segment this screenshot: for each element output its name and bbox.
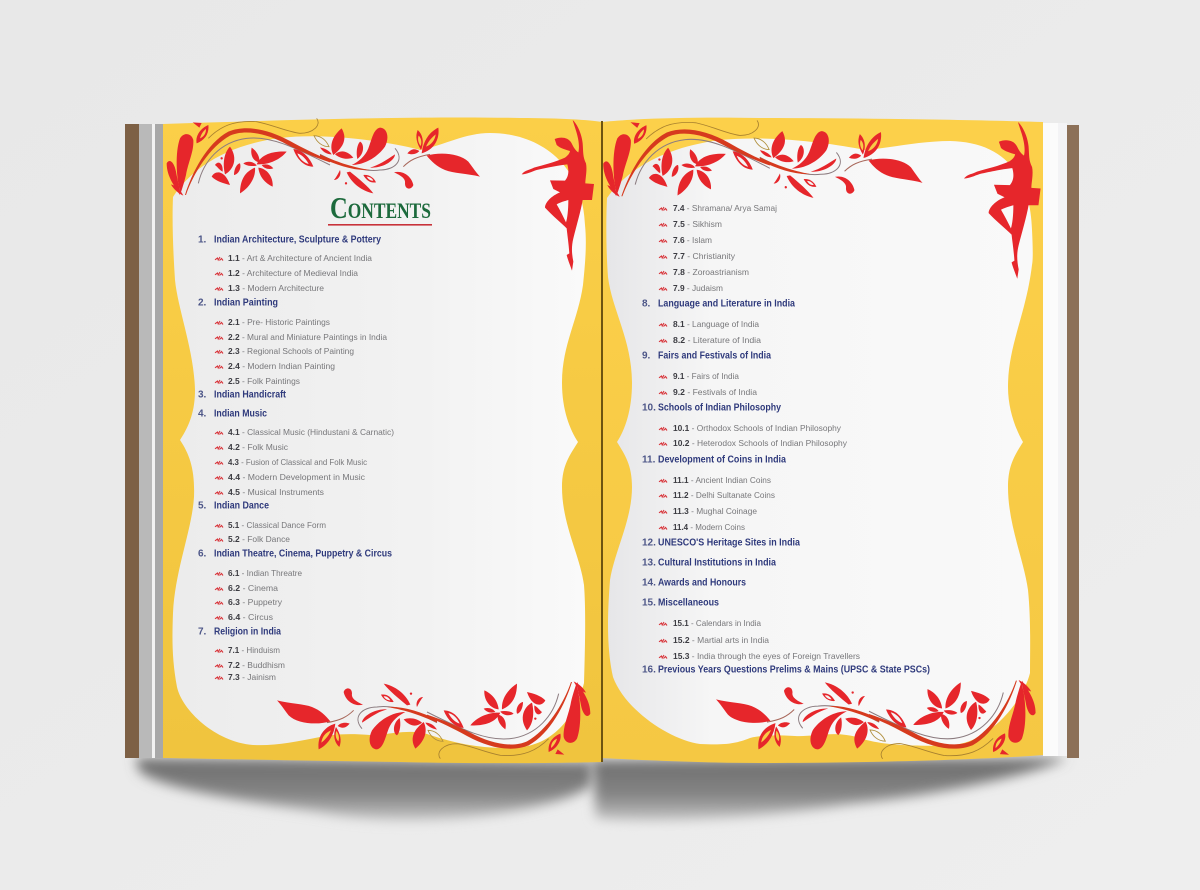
section 16: 16.: [642, 664, 656, 676]
floral ornament: right page top: [603, 118, 924, 202]
section 8: 8.: [642, 298, 651, 310]
section 4: 4.1 - Classical Music (Hindustani & Carnatic): [228, 427, 394, 437]
section 13: 13.: [642, 558, 656, 568]
floral ornament: left page bottom: [277, 681, 590, 759]
section 10: 10.2 - Heterodox Schools of Indian Philosophy: [673, 438, 848, 448]
section 5: 5.: [198, 500, 207, 512]
section 7 continued: 7.5 - Sikhism: [673, 219, 722, 229]
section 2: 2.3 - Regional Schools of Painting: [228, 346, 354, 356]
right cover edge and page stack: [1043, 123, 1079, 758]
section 4: [198, 408, 394, 497]
section 7: 7.: [198, 626, 207, 638]
section 3: Indian Handicraft: [214, 390, 287, 400]
spine: [601, 121, 603, 762]
section 14: Awards and Honours: [658, 578, 746, 588]
section 10: 10.1 - Orthodox Schools of Indian Philosophy: [673, 423, 842, 433]
section 16: Previous Years Questions Prelims & Mains (UPSC & State PSCs): [658, 664, 930, 676]
section 7: 7.2 - Buddhism: [228, 660, 285, 670]
section 6: 6.4 - Circus: [228, 612, 273, 622]
section 9: Fairs and Festivals of India: [658, 350, 771, 362]
section 6: 6.: [198, 548, 207, 560]
section 3: 3.: [198, 390, 207, 400]
section 6: 6.2 - Cinema: [228, 583, 278, 593]
section 4: 4.3 - Fusion of Classical and Folk Music: [228, 457, 368, 467]
dancer silhouette: left page: [522, 120, 594, 271]
section 4: 4.5 - Musical Instruments: [228, 487, 324, 497]
section 7 continued: 7.8 - Zoroastrianism: [673, 267, 749, 277]
left cover edge and page stack: [125, 124, 164, 758]
section 8: Language and Literature in India: [658, 298, 795, 310]
section 15: 15.: [642, 598, 656, 608]
section 12: 12.: [642, 538, 656, 548]
section 9: 9.1 - Fairs of India: [673, 371, 739, 381]
section 6: 6.1 - Indian Threatre: [228, 568, 302, 578]
section 11: Development of Coins in India: [658, 454, 786, 466]
section 15: 15.2 - Martial arts in India: [673, 635, 769, 645]
floral ornament: left page top: [167, 118, 480, 196]
book shadow: right page: [592, 758, 1067, 820]
section 6: 6.3 - Puppetry: [228, 597, 283, 607]
section 7: 7.1 - Hinduism: [228, 645, 280, 655]
section 7: [198, 626, 285, 682]
section 14: 14.: [642, 578, 656, 588]
section 7 continued: 7.6 - Islam: [673, 235, 712, 245]
section 7 continued: 7.4 - Shramana/ Arya Samaj: [673, 203, 777, 213]
section 1: Indian Architecture, Sculpture & Pottery: [214, 234, 381, 246]
section 6: [198, 548, 392, 622]
section 1: 1.1 - Art & Architecture of Ancient India: [228, 253, 372, 263]
title: Contents: [330, 190, 431, 225]
section 6: Indian Theatre, Cinema, Puppetry & Circus: [214, 548, 392, 560]
section 2: Indian Painting: [214, 298, 278, 308]
section 2: [198, 298, 387, 386]
section 2: 2.4 - Modern Indian Painting: [228, 361, 335, 371]
section 4: 4.4 - Modern Development in Music: [228, 472, 366, 482]
section 1: [198, 234, 381, 293]
left page white panel: [172, 133, 586, 748]
section 9: 9.: [642, 350, 651, 362]
section 1: 1.3 - Modern Architecture: [228, 283, 324, 293]
section 9: [642, 350, 771, 397]
section 15: 15.3 - India through the eyes of Foreign Travellers: [673, 651, 860, 661]
section 7 continued: [659, 203, 777, 293]
section 5: 5.2 - Folk Dance: [228, 534, 290, 544]
section 11: 11.3 - Mughal Coinage: [673, 506, 757, 516]
left page yellow: [163, 117, 602, 763]
section 7: Religion in India: [214, 626, 281, 638]
section 11: 11.4 - Modern Coins: [673, 522, 745, 532]
section 8: 8.2 - Literature of India: [673, 335, 761, 345]
section 4: 4.2 - Folk Music: [228, 442, 289, 452]
section 2: 2.: [198, 298, 207, 308]
section 2: 2.1 - Pre- Historic Paintings: [228, 317, 330, 327]
section 2: 2.5 - Folk Paintings: [228, 376, 300, 386]
section 15: 15.1 - Calendars in India: [673, 618, 761, 628]
right page white panel: [606, 138, 1033, 746]
section 15: Miscellaneous: [658, 598, 719, 608]
section 2: 2.2 - Mural and Miniature Paintings in India: [228, 332, 387, 342]
section 8: 8.1 - Language of India: [673, 319, 759, 329]
book shadow: left page: [135, 758, 592, 820]
floral ornament: right page bottom: [716, 680, 1036, 759]
section 1: 1.2 - Architecture of Medieval India: [228, 268, 358, 278]
section 5: Indian Dance: [214, 500, 269, 512]
section 9: 9.2 - Festivals of India: [673, 387, 757, 397]
section 5: [198, 500, 326, 544]
section 7: 7.3 - Jainism: [228, 672, 276, 682]
section 8: [642, 298, 795, 345]
section 15: [642, 598, 860, 661]
section 7 continued: 7.9 - Judaism: [673, 283, 723, 293]
section 12: UNESCO'S Heritage Sites in India: [658, 538, 800, 548]
dancer silhouette: right page: [964, 122, 1041, 279]
section 1: 1.: [198, 234, 207, 246]
section 11: 11.2 - Delhi Sultanate Coins: [673, 490, 775, 500]
section 10: 10.: [642, 402, 656, 414]
section 10: [642, 402, 848, 448]
section 4: 4.: [198, 408, 207, 420]
section 11: 11.1 - Ancient Indian Coins: [673, 475, 771, 485]
section 10: Schools of Indian Philosophy: [658, 402, 781, 414]
section 11: 11.: [642, 454, 656, 466]
section 4: Indian Music: [214, 408, 267, 420]
right page yellow: [602, 118, 1043, 763]
section 7 continued: 7.7 - Christianity: [673, 251, 736, 261]
section 5: 5.1 - Classical Dance Form: [228, 520, 326, 530]
section 13: Cultural Institutions in India: [658, 558, 776, 568]
section 11: [642, 454, 786, 532]
